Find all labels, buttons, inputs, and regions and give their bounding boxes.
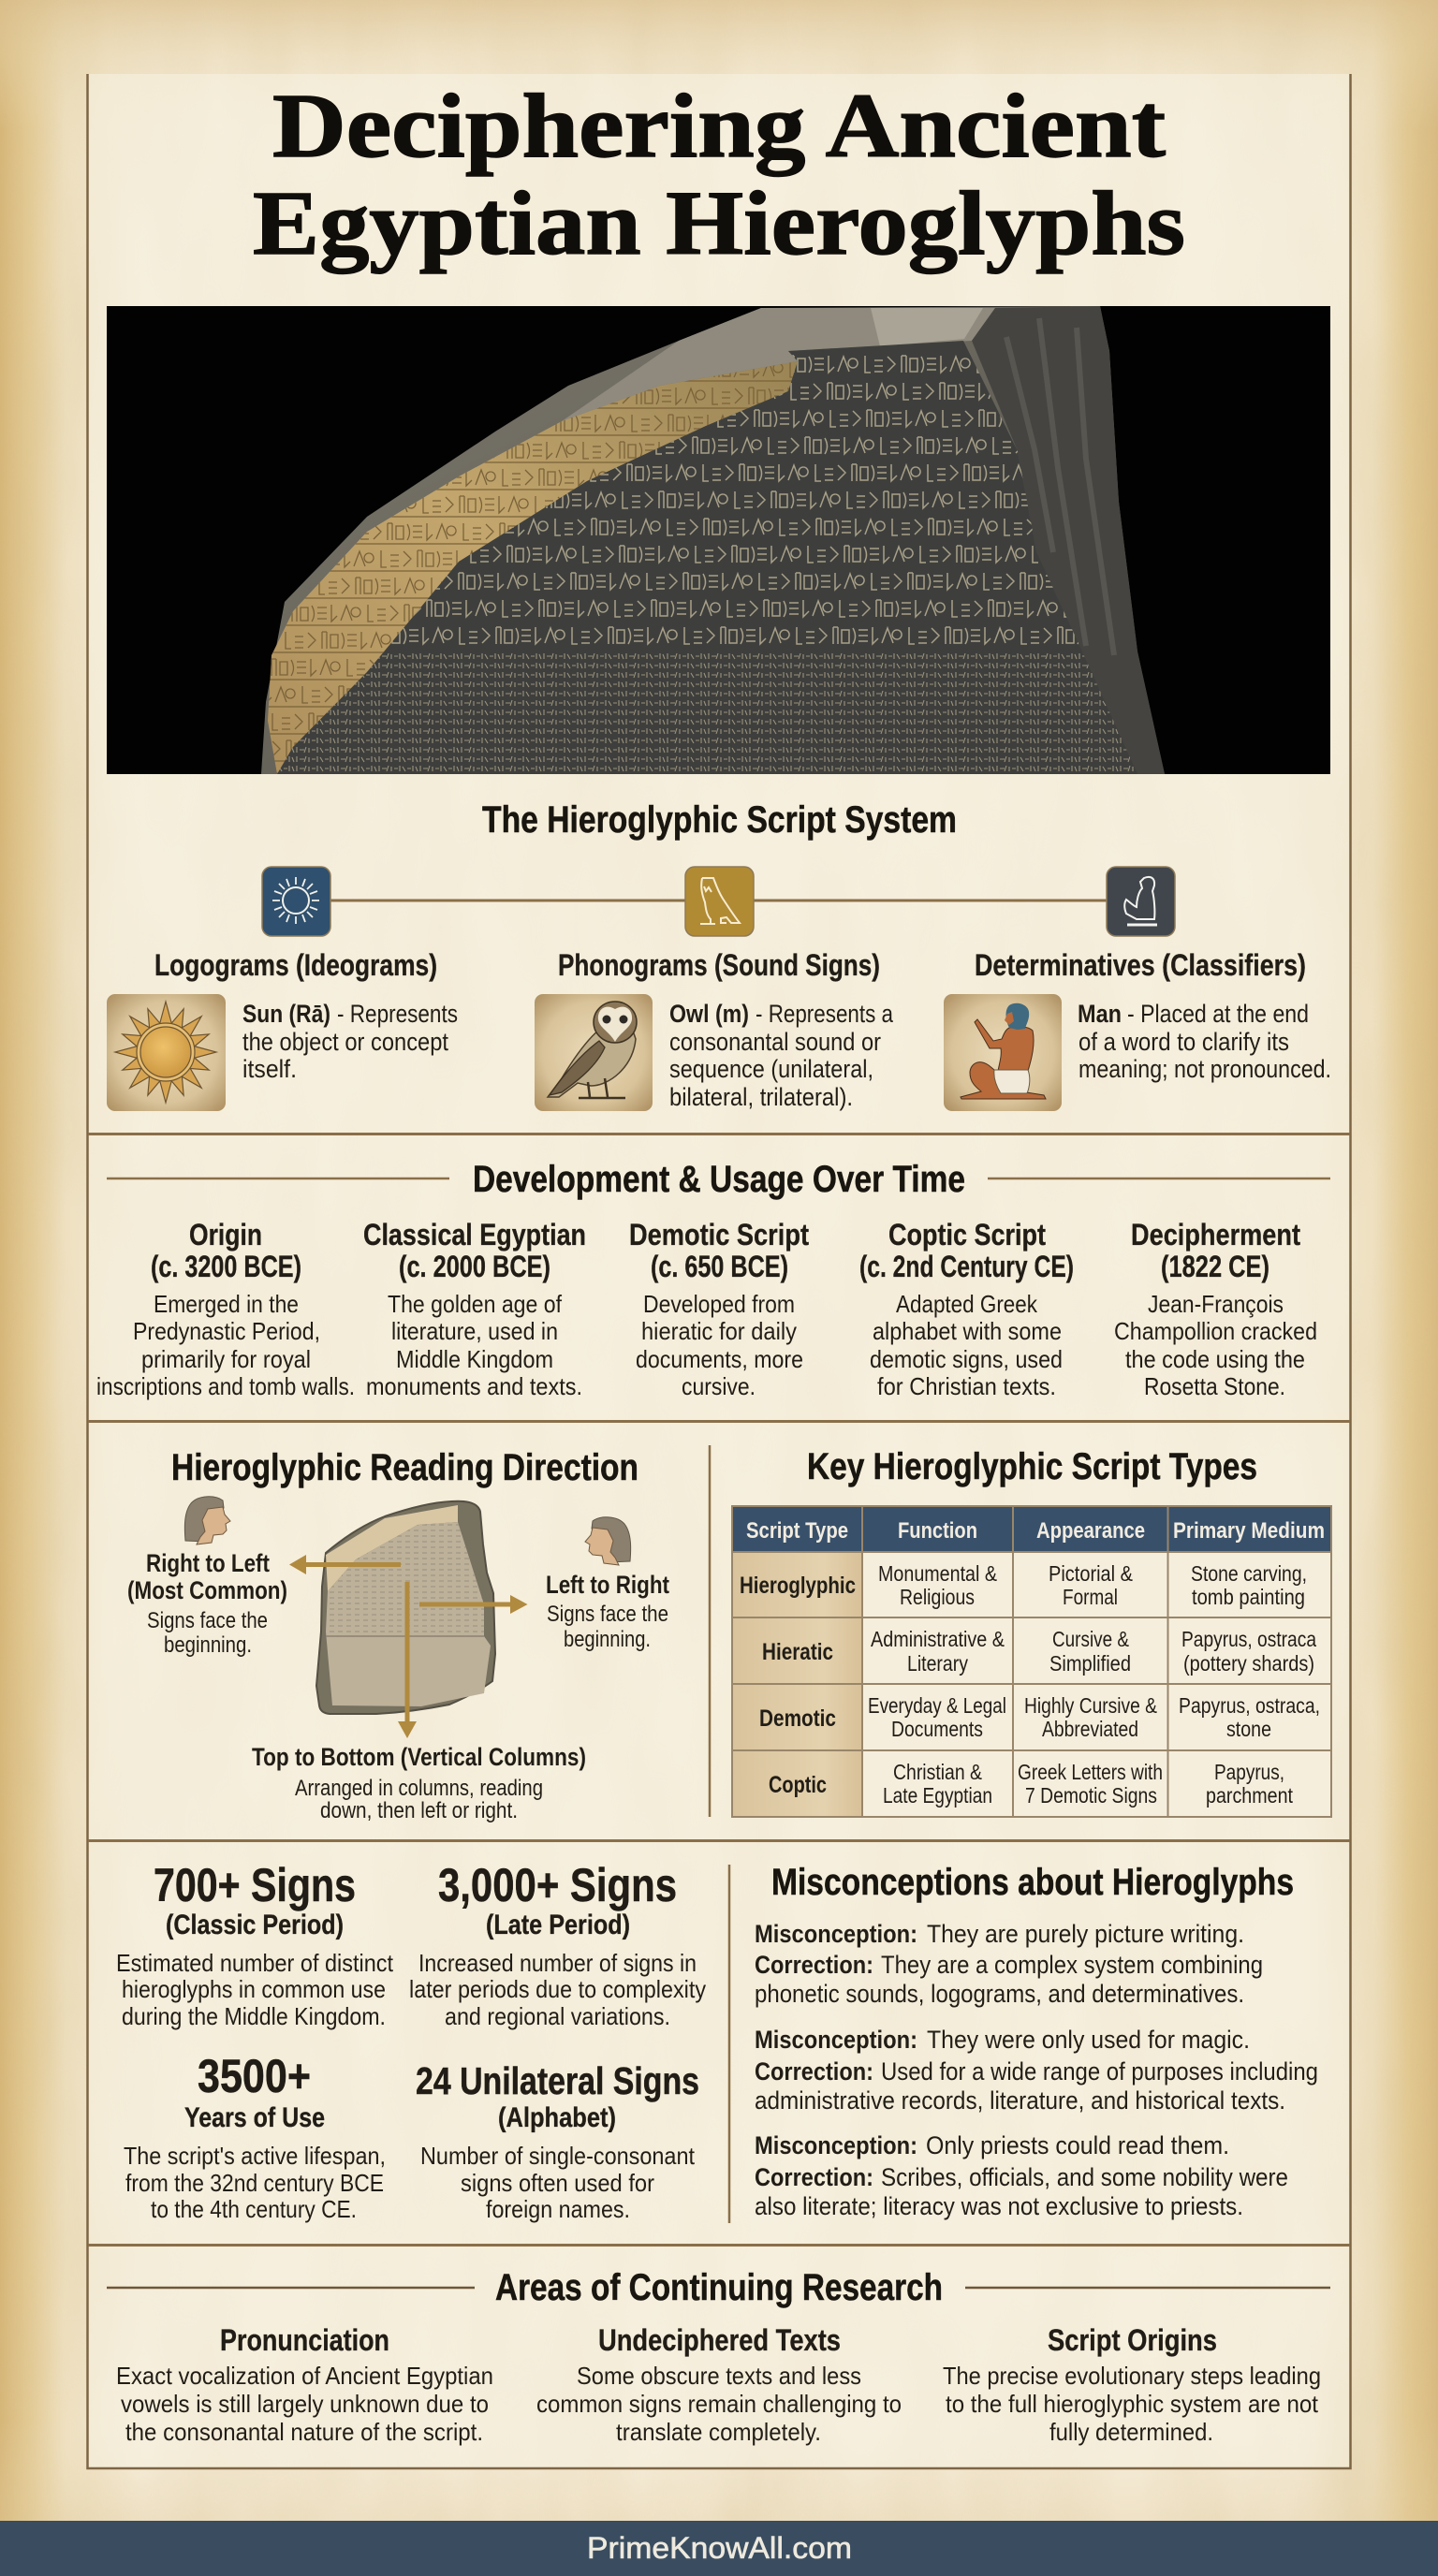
misconception 3: Only priests could read them. bbox=[926, 2131, 1229, 2159]
heading: script system: The Hieroglyphic Script System bbox=[482, 799, 957, 841]
table row: coptic: Papyrus, bbox=[1214, 1760, 1284, 1784]
text: sun description: - Represents bbox=[337, 1000, 458, 1028]
panel: phonograms: Phonograms (Sound Signs) bbox=[558, 948, 880, 982]
research: pronunciation: vowels is still largely unknown due to bbox=[121, 2390, 489, 2418]
table row: hieratic: (pottery shards) bbox=[1183, 1651, 1314, 1676]
table row: hieratic: Literary bbox=[907, 1651, 968, 1676]
icon: owl illustration bbox=[535, 994, 653, 1111]
misconception 3: Correction: bbox=[755, 2163, 873, 2191]
timeline: classical egyptian: (c. 2000 BCE) bbox=[399, 1250, 550, 1283]
stat: 3,000+ signs: (Late Period) bbox=[486, 1910, 630, 1940]
icon: owl badge bbox=[685, 867, 754, 936]
icon: sun badge bbox=[262, 867, 330, 936]
text: owl description: consonantal sound or bbox=[669, 1028, 881, 1056]
misconception 2: administrative records, literature, and historical texts. bbox=[755, 2086, 1285, 2115]
misconception 2: Used for a wide range of purposes including bbox=[881, 2057, 1318, 2086]
table header: Script Type bbox=[746, 1518, 848, 1544]
table row: hieroglyphic: Stone carving, bbox=[1191, 1561, 1307, 1586]
timeline: origin: inscriptions and tomb walls. bbox=[96, 1372, 355, 1400]
icon: head facing left bbox=[585, 1517, 631, 1565]
research: undeciphered texts: common signs remain challenging to bbox=[536, 2390, 902, 2418]
research: undeciphered texts: Undeciphered Texts bbox=[598, 2323, 841, 2357]
table row: demotic: Demotic bbox=[759, 1705, 836, 1732]
timeline: origin: primarily for royal bbox=[141, 1345, 311, 1373]
timeline: origin: Origin bbox=[189, 1218, 262, 1251]
timeline: classical egyptian: Classical Egyptian bbox=[363, 1218, 586, 1251]
table row: demotic: stone bbox=[1226, 1717, 1271, 1741]
arrow: top to bottom bbox=[398, 1582, 417, 1738]
text: top to bottom: Arranged in columns, reading bbox=[295, 1776, 543, 1801]
stat: 24 unilateral signs: Number of single-consonant bbox=[420, 2142, 696, 2170]
table row: hieroglyphic: Religious bbox=[900, 1585, 975, 1609]
table row: coptic: Greek Letters with bbox=[1018, 1760, 1163, 1784]
panel: phonograms bbox=[535, 948, 894, 1111]
research: pronunciation bbox=[116, 2323, 493, 2446]
table row: hieroglyphic: Monumental & bbox=[878, 1561, 997, 1586]
table header: Function bbox=[898, 1518, 977, 1544]
timeline: classical egyptian: The golden age of bbox=[388, 1290, 563, 1318]
text: left to right: Left to Right bbox=[546, 1571, 669, 1599]
timeline: classical egyptian: Middle Kingdom bbox=[396, 1345, 553, 1373]
timeline: demotic script: Developed from bbox=[643, 1290, 795, 1318]
timeline: origin: Emerged in the bbox=[154, 1290, 299, 1318]
table row: demotic: Abbreviated bbox=[1042, 1717, 1138, 1741]
timeline: demotic script: Demotic Script bbox=[629, 1218, 809, 1251]
timeline: demotic script: (c. 650 BCE) bbox=[651, 1250, 788, 1283]
misconception 2 bbox=[755, 2026, 1318, 2115]
timeline: decipherment bbox=[1114, 1218, 1317, 1400]
table header bbox=[746, 1518, 1325, 1544]
icon: sun illustration bbox=[107, 994, 226, 1111]
timeline: coptic script: demotic signs, used bbox=[870, 1345, 1063, 1373]
research: pronunciation: Pronunciation bbox=[220, 2323, 389, 2357]
footer band: PrimeKnowAll.com bbox=[587, 2531, 852, 2565]
timeline: demotic script: hieratic for daily bbox=[641, 1317, 797, 1345]
table row: coptic bbox=[769, 1760, 1294, 1808]
research: pronunciation: the consonantal nature of the script. bbox=[125, 2418, 483, 2446]
title bbox=[253, 76, 1185, 273]
research: script origins: fully determined. bbox=[1049, 2418, 1213, 2446]
panel: determinatives: Determinatives (Classifiers) bbox=[975, 948, 1306, 982]
timeline: classical egyptian bbox=[363, 1218, 586, 1400]
text: sun description bbox=[242, 1000, 458, 1083]
text: right to left: Signs face the bbox=[147, 1608, 268, 1633]
table row: hieroglyphic: tomb painting bbox=[1192, 1585, 1305, 1609]
table header: Primary Medium bbox=[1173, 1518, 1325, 1544]
panel: misconceptions bbox=[755, 1862, 1318, 2220]
heading: key script types: Key Hieroglyphic Script Types bbox=[807, 1446, 1257, 1487]
table row: coptic: 7 Demotic Signs bbox=[1025, 1783, 1157, 1808]
research: script origins: Script Origins bbox=[1048, 2323, 1217, 2357]
stat: 3500+ years: Years of Use bbox=[184, 2102, 325, 2133]
table header: Appearance bbox=[1036, 1518, 1145, 1544]
timeline: coptic script: for Christian texts. bbox=[877, 1372, 1056, 1400]
heading: development and usage: Development & Usage Over Time bbox=[473, 1159, 965, 1200]
text: owl description: bilateral, trilateral). bbox=[669, 1083, 853, 1111]
table row: demotic: Papyrus, ostraca, bbox=[1179, 1693, 1320, 1718]
title: Egyptian Hieroglyphs bbox=[253, 173, 1185, 273]
stat: 3500+ years bbox=[124, 2050, 386, 2223]
table row: demotic bbox=[759, 1693, 1320, 1741]
text: left to right bbox=[546, 1571, 669, 1652]
stat: 3,000+ signs bbox=[409, 1859, 706, 2030]
text: man description: of a word to clarify its bbox=[1078, 1028, 1289, 1056]
misconception 2: Correction: bbox=[755, 2057, 873, 2086]
table row: hieroglyphic: Formal bbox=[1063, 1585, 1118, 1609]
panel: logograms: Logograms (Ideograms) bbox=[154, 948, 437, 982]
research: undeciphered texts: Some obscure texts and less bbox=[577, 2362, 861, 2390]
title: Deciphering Ancient bbox=[272, 76, 1166, 176]
misconception 3: also literate; literacy was not exclusive to priests. bbox=[755, 2192, 1243, 2220]
stat: 3,000+ signs: and regional variations. bbox=[445, 2002, 670, 2030]
timeline: origin bbox=[96, 1218, 355, 1400]
stat: 3,000+ signs: later periods due to complexity bbox=[409, 1975, 706, 2003]
stat: 24 unilateral signs: foreign names. bbox=[486, 2195, 630, 2223]
table row: coptic: parchment bbox=[1206, 1783, 1294, 1808]
table: script types bbox=[732, 1506, 1331, 1817]
misconception 2: Misconception: bbox=[755, 2026, 917, 2054]
diagram: stone with reading arrows bbox=[289, 1501, 528, 1738]
table row: hieratic: Administrative & bbox=[871, 1627, 1005, 1651]
misconception 3: Scribes, officials, and some nobility were bbox=[881, 2163, 1288, 2191]
section dividers bbox=[88, 1134, 1350, 2245]
text: right to left: beginning. bbox=[164, 1632, 252, 1658]
stat: 3,000+ signs: 3,000+ Signs bbox=[438, 1859, 677, 1911]
arrow: left to right bbox=[419, 1595, 528, 1614]
research: undeciphered texts: translate completely. bbox=[616, 2418, 821, 2446]
icon: seated man badge bbox=[1107, 867, 1175, 936]
misconception 3: Misconception: bbox=[755, 2131, 917, 2159]
text: left to right: Signs face the bbox=[547, 1602, 668, 1627]
text: right to left bbox=[127, 1549, 287, 1658]
heading: reading direction: Hieroglyphic Reading Direction bbox=[171, 1447, 638, 1488]
text: man description: meaning; not pronounced. bbox=[1078, 1055, 1331, 1083]
icon: seated man illustration bbox=[944, 994, 1062, 1111]
timeline: coptic script: Adapted Greek bbox=[896, 1290, 1038, 1318]
research: script origins: to the full hieroglyphic system are not bbox=[946, 2390, 1319, 2418]
timeline: origin: Predynastic Period, bbox=[133, 1317, 320, 1345]
table row: demotic: Everyday & Legal bbox=[868, 1693, 1006, 1718]
stat: 700+ signs: (Classic Period) bbox=[166, 1910, 344, 1940]
text: man description: - Placed at the end bbox=[1127, 1000, 1309, 1028]
text: right to left: (Most Common) bbox=[127, 1576, 287, 1604]
stat: 24 unilateral signs: signs often used for bbox=[461, 2169, 654, 2197]
misconception 1 bbox=[755, 1920, 1263, 2008]
heading: continuing research: Areas of Continuing Research bbox=[495, 2267, 943, 2308]
table row: hieratic: Papyrus, ostraca bbox=[1181, 1627, 1316, 1651]
stat: 700+ signs bbox=[116, 1859, 394, 2030]
text: owl description: Owl (m) bbox=[669, 1000, 749, 1028]
text: owl description bbox=[669, 1000, 894, 1111]
text: man description: Man bbox=[1078, 1000, 1122, 1028]
table row: hieratic: Hieratic bbox=[762, 1639, 833, 1665]
table row: hieroglyphic: Hieroglyphic bbox=[740, 1573, 856, 1599]
hero image: Rosetta Stone photo bbox=[107, 306, 1405, 774]
stat: 3500+ years: 3500+ bbox=[198, 2050, 311, 2102]
stat: 24 unilateral signs bbox=[416, 2059, 699, 2223]
stat: 3500+ years: to the 4th century CE. bbox=[151, 2195, 357, 2223]
research: script origins: The precise evolutionary steps leading bbox=[943, 2362, 1321, 2390]
table row: demotic: Documents bbox=[891, 1717, 983, 1741]
text: sun description: Sun (Rā) bbox=[242, 1000, 330, 1028]
text: owl description: - Represents a bbox=[756, 1000, 894, 1028]
footer band bbox=[0, 2521, 1438, 2576]
text: top to bottom: down, then left or right. bbox=[320, 1798, 518, 1823]
text: left to right: beginning. bbox=[564, 1627, 651, 1652]
stat: 24 unilateral signs: (Alphabet) bbox=[498, 2102, 616, 2133]
text: sun description: the object or concept bbox=[242, 1028, 448, 1056]
timeline: decipherment: the code using the bbox=[1125, 1345, 1305, 1373]
misconception 1: They are purely picture writing. bbox=[927, 1920, 1244, 1948]
table row: hieratic: Simplified bbox=[1049, 1651, 1131, 1676]
misconception 3 bbox=[755, 2131, 1288, 2220]
table row: demotic: Highly Cursive & bbox=[1024, 1693, 1157, 1718]
table row: hieratic: Cursive & bbox=[1052, 1627, 1129, 1651]
timeline: origin: (c. 3200 BCE) bbox=[151, 1250, 301, 1283]
misconception 1: Correction: bbox=[755, 1951, 873, 1979]
table row: coptic: Christian & bbox=[893, 1760, 982, 1784]
timeline: coptic script bbox=[859, 1218, 1074, 1400]
misconception 1: Misconception: bbox=[755, 1920, 917, 1948]
table row: hieroglyphic bbox=[740, 1561, 1307, 1609]
timeline: coptic script: (c. 2nd Century CE) bbox=[859, 1250, 1074, 1283]
misconception 1: phonetic sounds, logograms, and determinatives. bbox=[755, 1980, 1244, 2008]
stat: 700+ signs: 700+ Signs bbox=[154, 1859, 356, 1911]
timeline: decipherment: Decipherment bbox=[1131, 1218, 1300, 1251]
timeline: classical egyptian: literature, used in bbox=[391, 1317, 558, 1345]
table row: hieroglyphic: Pictorial & bbox=[1049, 1561, 1133, 1586]
connector line between icons bbox=[330, 899, 1107, 902]
text: top to bottom: Top to Bottom (Vertical Columns) bbox=[252, 1743, 586, 1771]
timeline: decipherment: (1822 CE) bbox=[1161, 1250, 1269, 1283]
research: script origins bbox=[943, 2323, 1321, 2446]
timeline: demotic script: documents, more bbox=[636, 1345, 803, 1373]
timeline: decipherment: Champollion cracked bbox=[1114, 1317, 1317, 1345]
icon: head facing right bbox=[184, 1497, 230, 1544]
timeline: decipherment: Jean-François bbox=[1148, 1290, 1284, 1318]
timeline: demotic script: cursive. bbox=[682, 1372, 756, 1400]
stat: 700+ signs: Estimated number of distinct bbox=[116, 1949, 394, 1977]
table row: hieratic bbox=[762, 1627, 1316, 1676]
misconception 1: They are a complex system combining bbox=[881, 1951, 1263, 1979]
misconception 2: They were only used for magic. bbox=[927, 2026, 1250, 2054]
heading: misconceptions: Misconceptions about Hieroglyphs bbox=[771, 1862, 1294, 1903]
stat: 700+ signs: hieroglyphs in common use bbox=[122, 1975, 386, 2003]
text: owl description: sequence (unilateral, bbox=[669, 1055, 873, 1083]
stat: 3,000+ signs: Increased number of signs in bbox=[418, 1949, 697, 1977]
timeline: coptic script: Coptic Script bbox=[888, 1218, 1046, 1251]
timeline: demotic script bbox=[629, 1218, 809, 1400]
timeline: coptic script: alphabet with some bbox=[873, 1317, 1062, 1345]
timeline: decipherment: Rosetta Stone. bbox=[1144, 1372, 1285, 1400]
stat: 3500+ years: The script's active lifespan, bbox=[124, 2142, 386, 2170]
text: man description bbox=[1078, 1000, 1331, 1083]
text: sun description: itself. bbox=[242, 1055, 297, 1083]
panel: determinatives bbox=[944, 948, 1331, 1111]
stat: 3500+ years: from the 32nd century BCE bbox=[125, 2169, 384, 2197]
stat: 700+ signs: during the Middle Kingdom. bbox=[122, 2002, 386, 2030]
timeline: classical egyptian: monuments and texts. bbox=[366, 1372, 582, 1400]
text: right to left: Right to Left bbox=[146, 1549, 270, 1577]
research: undeciphered texts bbox=[536, 2323, 902, 2446]
stat: 24 unilateral signs: 24 Unilateral Signs bbox=[416, 2059, 699, 2102]
panel: logograms bbox=[107, 948, 458, 1111]
table row: coptic: Coptic bbox=[769, 1772, 827, 1798]
arrow: right to left bbox=[289, 1555, 401, 1574]
research: pronunciation: Exact vocalization of Ancient Egyptian bbox=[116, 2362, 493, 2390]
table row: coptic: Late Egyptian bbox=[883, 1783, 992, 1808]
text: top to bottom bbox=[252, 1743, 586, 1823]
